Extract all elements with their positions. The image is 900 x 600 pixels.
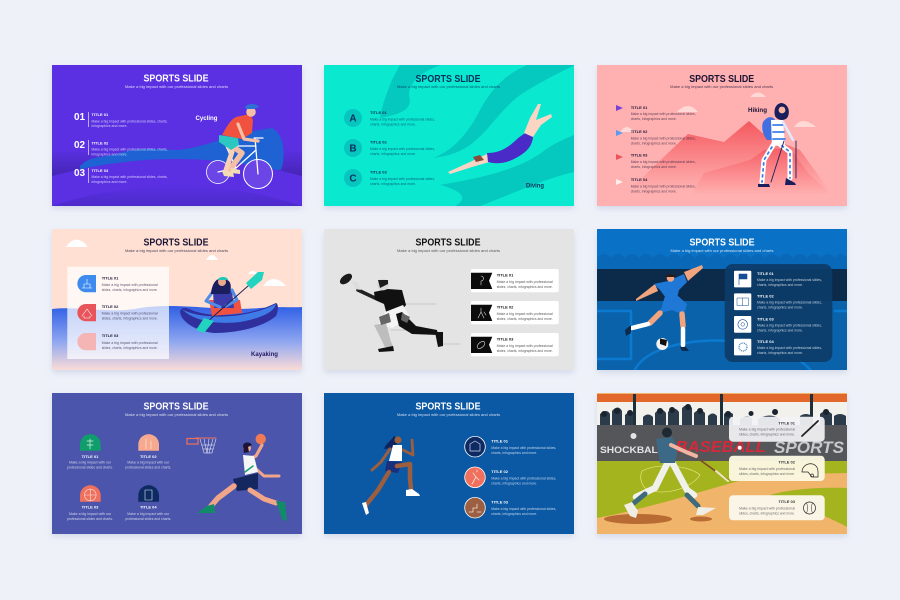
subheading: Make a big impact with our professional slides and charts: [125, 85, 228, 89]
item B: TITLE 02: [370, 140, 387, 144]
item 03: charts, infographics and more.: [631, 165, 677, 169]
item 01: Make a big impact with professional slides, charts,: [92, 120, 168, 124]
heading: SPORTS SLIDE: [144, 74, 209, 84]
item 03: [465, 497, 556, 518]
item 04: TITLE 04: [631, 177, 648, 182]
item 01: TITLE 01: [497, 272, 514, 278]
item 02: charts, infographics and more.: [491, 482, 537, 486]
illustration: cyclist: [206, 104, 272, 188]
item 01: TITLE 01: [631, 105, 648, 110]
heading: SPORTS SLIDE: [144, 402, 209, 412]
item 03: TITLE 03: [631, 152, 648, 158]
item 03: [77, 333, 158, 350]
item 03: charts, infographics and more.: [491, 512, 537, 516]
item 01: charts, infographics and more.: [491, 451, 537, 455]
item 02: Make a big impact with professional slides,: [757, 301, 822, 305]
item B: charts, infographics and more.: [370, 152, 416, 156]
illustration: football player: [338, 272, 460, 352]
panel: baseball slide: [597, 393, 847, 534]
item C: charts, infographics and more.: [370, 182, 416, 186]
item 01: Make a big impact with our: [69, 460, 112, 464]
heading: SPORTS SLIDE: [689, 74, 754, 85]
label: Diving: Diving: [526, 182, 544, 190]
item 01: TITLE 01: [757, 271, 774, 276]
item 02: Make a big impact with professional: [497, 312, 553, 316]
illustration: hiker: [758, 103, 796, 187]
heading: SPORTS SLIDE: [144, 238, 209, 248]
illustration: diver: [448, 104, 552, 174]
heading: SPORTS SLIDE: [416, 74, 481, 85]
item 01: [471, 269, 559, 292]
item A: TITLE 01: [370, 110, 387, 115]
illustration: basketball hoop: [187, 438, 216, 453]
item 03: infographics and more.: [92, 180, 128, 184]
panel: hiking slide: [597, 65, 847, 206]
item 04: TITLE 04: [140, 504, 157, 510]
item B: B: [349, 144, 357, 154]
subheading: Make a big impact with our professional slides and charts: [125, 413, 228, 417]
subheading: Make a big impact with our professional slides and charts: [670, 85, 773, 89]
item 01: Make a big impact with professional slides,: [631, 112, 696, 116]
item 03: slides, charts, infographics and more.: [102, 346, 158, 350]
subheading: Make a big impact with our professional slides and charts: [670, 249, 774, 253]
item 04: charts, infographics and more.: [757, 351, 803, 355]
item 02: Make a big impact with our: [127, 460, 170, 464]
item 01: infographics and more.: [92, 124, 128, 128]
label: Kayaking: Kayaking: [251, 351, 278, 358]
item 02: [729, 456, 825, 481]
item 03: [74, 168, 168, 184]
item 01: [734, 271, 822, 287]
item 01: [616, 105, 696, 121]
item 02: Make a big impact with professional: [102, 312, 158, 316]
item 02: Make a big impact with professional: [739, 467, 795, 471]
item 01: charts, infographics and more.: [631, 117, 677, 121]
item 04: charts, infographics and more.: [631, 190, 677, 194]
item 02: [74, 140, 168, 156]
item 02: [465, 467, 556, 488]
item 01: TITLE 01: [102, 276, 119, 280]
subheading: Make a big impact with our professional slides and charts: [397, 413, 500, 417]
item 01: Make a big impact with professional: [102, 283, 158, 287]
item 02: professional slides and charts.: [125, 466, 171, 470]
item 03: slides, charts, infographics and more.: [739, 512, 795, 516]
illustration: runner: [362, 436, 420, 515]
item 01: [729, 417, 825, 442]
item 03: TITLE 03: [82, 504, 99, 510]
panel: soccer slide: [597, 229, 847, 372]
item 04: Make a big impact with professional slides,: [757, 346, 822, 350]
item 04: TITLE 04: [757, 339, 774, 344]
item A: Make a big impact with professional slides,: [370, 118, 435, 122]
item 02: TITLE 02: [92, 140, 109, 146]
item 01: slides, charts, infographics and more.: [739, 432, 795, 436]
panel: running slide: [324, 393, 574, 534]
item 02: TITLE 02: [140, 454, 157, 459]
panel: cycling slide: [52, 65, 302, 206]
subheading: Make a big impact with our professional slides and charts: [125, 249, 228, 253]
illustration: soccer player: [625, 265, 703, 351]
item 01: charts, infographics and more.: [757, 283, 803, 287]
item 04: [125, 485, 171, 521]
item 02: slides, charts, infographics and more.: [102, 316, 158, 320]
item 03: TITLE 03: [778, 499, 796, 504]
item 03: Make a big impact with professional: [739, 506, 795, 510]
panel: diving slide: [324, 65, 575, 206]
item 01: Make a big impact with professional slides,: [491, 446, 556, 450]
item 03: Make a big impact with our: [69, 512, 112, 516]
card: text list: [67, 267, 169, 359]
item 03: TITLE 03: [497, 336, 514, 342]
item 03: [616, 152, 696, 169]
illustration: basketball player: [197, 434, 287, 521]
item 02: Make a big impact with professional slides,: [491, 476, 556, 480]
item 03: TITLE 03: [757, 316, 774, 321]
item 03: professional slides and charts.: [67, 517, 113, 521]
item A: A: [349, 114, 357, 124]
item 01: 01: [74, 112, 86, 123]
item A: charts, infographics and more.: [370, 122, 416, 126]
heading: SPORTS SLIDE: [690, 238, 755, 248]
item B: Make a big impact with professional slides,: [370, 147, 435, 151]
item 01: TITLE 01: [82, 454, 99, 459]
panel: basketball slide: [52, 393, 302, 534]
item 01: [465, 436, 556, 457]
item 02: Make a big impact with professional slides,: [631, 136, 696, 140]
scoreboard wall: BASEBALL: [676, 439, 766, 456]
item A: [344, 109, 435, 127]
item 01: TITLE 01: [491, 438, 509, 444]
item 04: [734, 339, 822, 355]
panel: football slide: [324, 229, 574, 370]
item 01: [67, 434, 113, 470]
item 03: TITLE 03: [102, 333, 119, 338]
item 01: [74, 112, 168, 128]
item 04: professional slides and charts.: [125, 517, 171, 521]
item C: [344, 169, 435, 187]
item 02: Make a big impact with professional slides, charts,: [92, 148, 168, 152]
item 02: TITLE 02: [497, 304, 514, 310]
item 03: [734, 316, 822, 333]
subheading: Make a big impact with our professional slides and charts: [397, 85, 500, 89]
item 03: Make a big impact with professional: [102, 341, 158, 345]
item 01: [77, 275, 158, 292]
item 03: TITLE 03: [92, 168, 109, 173]
item 03: Make a big impact with professional slides,: [757, 323, 822, 327]
scoreboard wall: SPORTS: [774, 438, 845, 457]
item 01: slides, charts, infographics and more.: [497, 285, 553, 289]
illustration: kayak and paddler: [180, 272, 278, 333]
item 03: 03: [74, 168, 86, 179]
item 03: slides, charts, infographics and more.: [497, 349, 553, 353]
item 01: Make a big impact with professional: [497, 280, 553, 284]
panel: kayaking slide: [52, 229, 302, 370]
item C: TITLE 03: [370, 170, 387, 174]
item 01: TITLE 01: [92, 112, 109, 117]
item 02: [734, 293, 822, 310]
item 01: professional slides and charts.: [67, 466, 113, 470]
item 04: Make a big impact with professional slides,: [631, 184, 696, 188]
item 02: charts, infographics and more.: [631, 142, 677, 146]
label: Cycling: Cycling: [196, 115, 218, 122]
item 03: Make a big impact with professional slides,: [631, 160, 696, 164]
heading: SPORTS SLIDE: [416, 402, 481, 412]
item 02: TITLE 02: [757, 294, 774, 299]
item 01: TITLE 01: [778, 420, 796, 426]
item 02: charts, infographics and more.: [757, 306, 803, 310]
item 02: [125, 434, 171, 470]
crowd silhouettes: [600, 405, 846, 425]
item 01: slides, charts, infographics and more.: [102, 288, 158, 292]
item 04: Make a big impact with our: [127, 512, 170, 516]
item 02: [616, 129, 696, 146]
item 02: TITLE 02: [491, 469, 509, 474]
item 02: TITLE 02: [102, 304, 119, 309]
item 03: Make a big impact with professional: [497, 344, 553, 348]
item 02: [77, 304, 158, 321]
subheading: Make a big impact with our professional slides and charts: [397, 249, 500, 253]
item C: C: [349, 174, 357, 184]
scoreboard wall: SHOCKBALL: [600, 445, 665, 455]
item C: Make a big impact with professional slides,: [370, 177, 435, 181]
item 02: slides, charts, infographics and more.: [739, 472, 795, 476]
item 02: TITLE 02: [631, 129, 648, 134]
scoreboard wall: [597, 425, 847, 461]
item 02: slides, charts, infographics and more.: [497, 317, 553, 321]
item 03: [67, 485, 113, 521]
item 04: [616, 177, 696, 194]
item 03: Make a big impact with professional slides,: [491, 507, 556, 511]
item 03: charts, infographics and more.: [757, 328, 803, 332]
item B: [344, 139, 435, 157]
item 03: Make a big impact with professional slides, charts,: [92, 175, 168, 179]
illustration: batter: [624, 428, 742, 518]
item 02: 02: [74, 140, 86, 151]
item 02: TITLE 02: [778, 460, 796, 464]
item 03: [729, 495, 825, 520]
item 02: infographics and more.: [92, 152, 128, 156]
item 01: Make a big impact with professional slides,: [757, 278, 822, 282]
heading: SPORTS SLIDE: [416, 238, 481, 248]
item 02: [471, 301, 559, 324]
item 03: TITLE 03: [491, 500, 509, 504]
label: Hiking: Hiking: [748, 107, 767, 114]
item 03: [471, 333, 559, 356]
item 01: Make a big impact with professional: [739, 428, 795, 432]
